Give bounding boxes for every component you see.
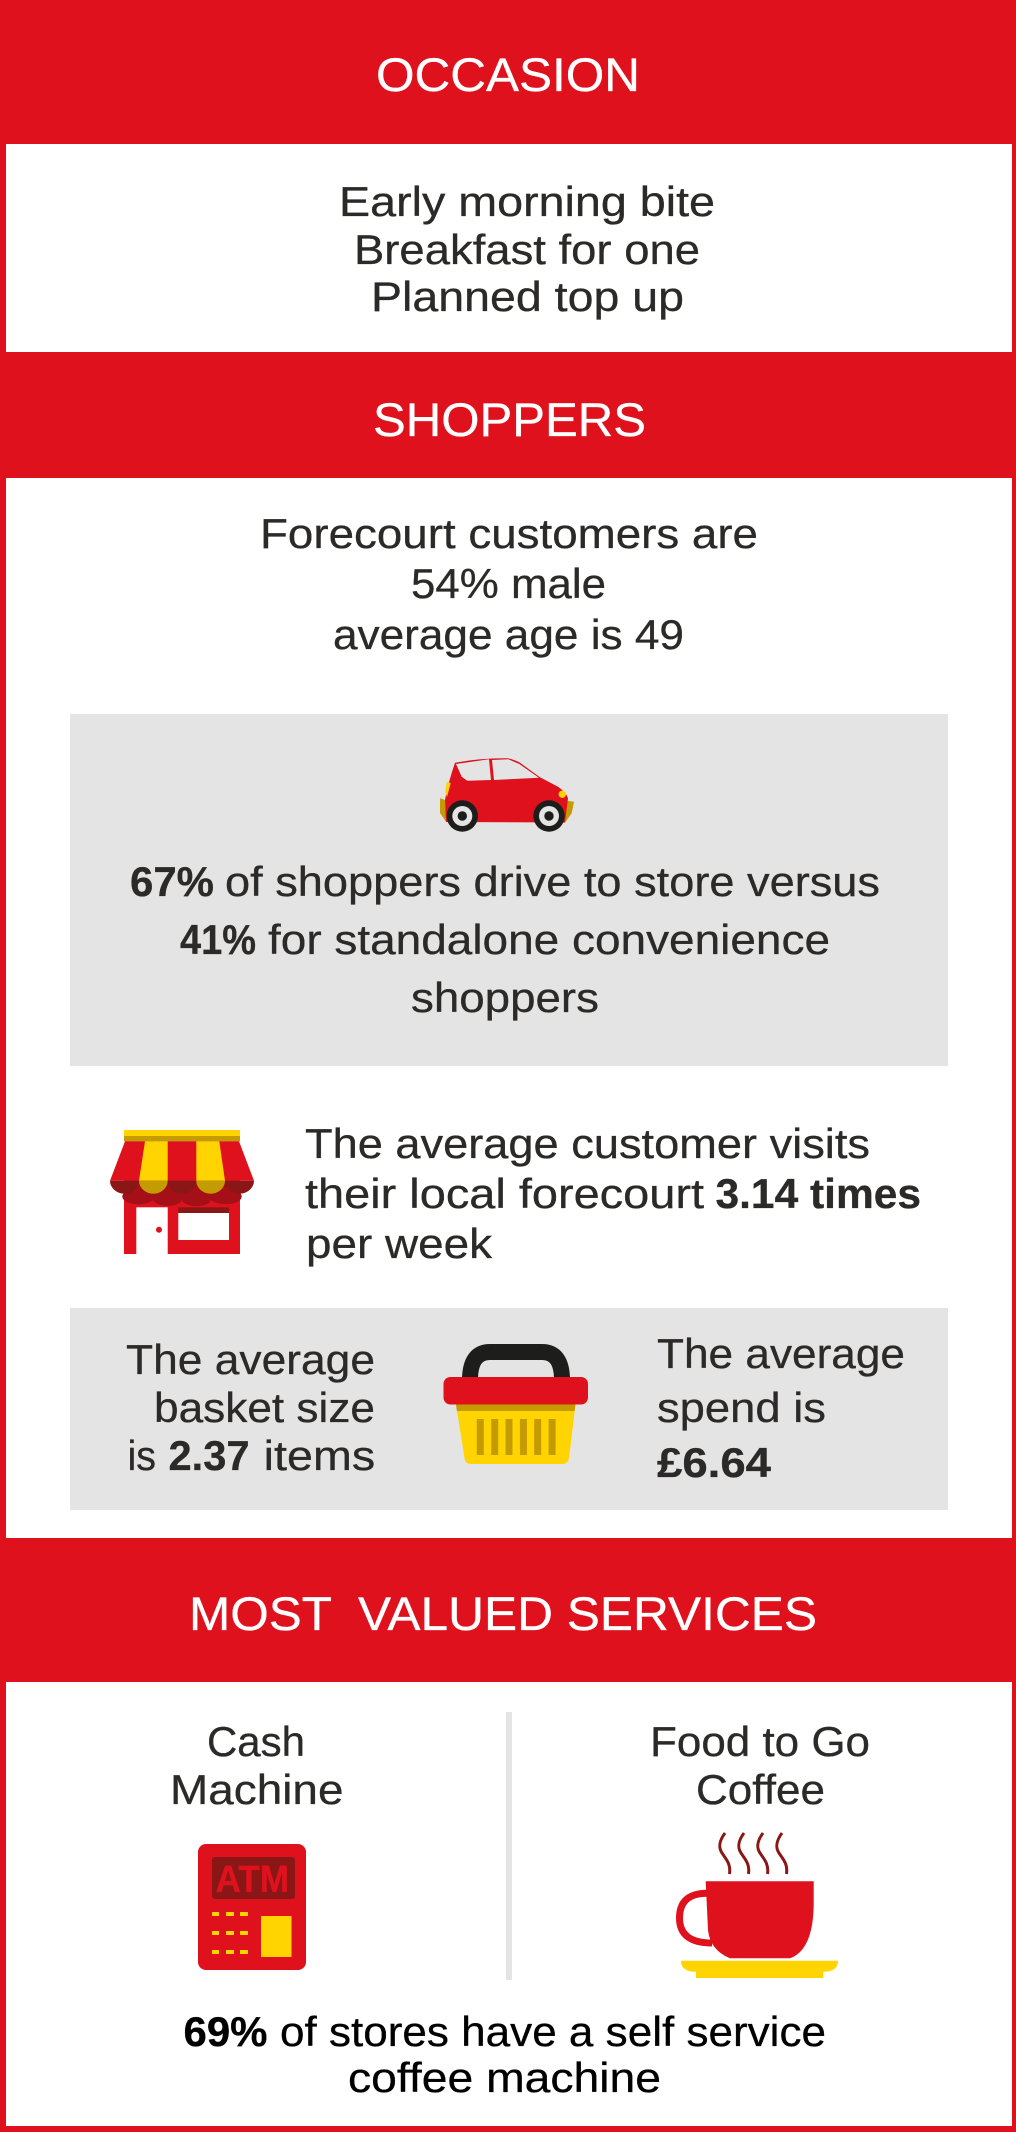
text: coffee machine statistic: of stores have a self service <box>280 2008 826 2055</box>
icon: shop front <box>110 1130 254 1254</box>
text: average spend <box>657 1330 905 1486</box>
text: basket size: items <box>264 1432 375 1479</box>
text: basket size: is <box>128 1432 156 1479</box>
heading: most valued services: VALUED SERVICES <box>358 1587 817 1640</box>
icon: coffee cup <box>680 1833 838 1978</box>
heading: shoppers: SHOPPERS <box>373 393 646 446</box>
heading: most valued services: MOST <box>189 1587 332 1640</box>
panel: most valued services <box>6 1682 1012 2126</box>
text: food to go coffee: Coffee <box>696 1766 825 1813</box>
text: basket size: 2.37 <box>168 1432 250 1479</box>
text: drive to store statistic: 41% <box>180 916 256 963</box>
text: cash machine: Cash <box>207 1718 305 1765</box>
panel: occasion list: Breakfast for one <box>354 226 700 273</box>
text: basket size <box>126 1336 375 1479</box>
text: basket size: The average <box>126 1336 375 1383</box>
text: visit frequency <box>305 1120 921 1267</box>
panel: shoppers <box>6 478 1012 1538</box>
text: food to go coffee <box>650 1718 870 1813</box>
text: average spend: The average <box>657 1330 905 1377</box>
text: basket size: basket size <box>154 1384 375 1431</box>
text: visit frequency: 3.14 times <box>716 1170 921 1217</box>
text: cash machine: Machine <box>170 1766 344 1813</box>
text: drive to store statistic: 67% <box>130 858 214 905</box>
text: drive to store statistic: shoppers <box>411 974 599 1021</box>
text: average spend: spend is <box>657 1384 826 1431</box>
text: drive to store statistic: for standalone convenience <box>268 916 830 963</box>
text: cash machine <box>170 1718 344 1813</box>
icon: car <box>440 758 574 832</box>
text: coffee machine statistic: 69% <box>184 2008 268 2055</box>
text: shopper demographics: 54% male <box>411 560 606 607</box>
text: shopper demographics: average age is 49 <box>333 611 684 658</box>
heading: occasion: OCCASION <box>376 48 640 101</box>
heading: shoppers <box>0 352 1016 478</box>
text: coffee machine statistic <box>184 2008 826 2101</box>
text: shopper demographics <box>260 510 758 658</box>
text: shopper demographics: Forecourt customers are <box>260 510 758 557</box>
text: visit frequency: The average customer visits <box>305 1120 870 1167</box>
text: coffee machine statistic: coffee machine <box>348 2054 661 2101</box>
icon: ATM: ATM <box>216 1859 289 1901</box>
panel: occasion list: Early morning bite <box>339 178 715 225</box>
icon: shopping basket <box>444 1352 588 1464</box>
text: drive to store statistic <box>130 858 880 1021</box>
text: food to go coffee: Food to Go <box>650 1718 870 1765</box>
panel: drive to store <box>70 714 948 1066</box>
heading: occasion <box>0 0 1016 144</box>
text: drive to store statistic: of shoppers drive to store versus <box>225 858 880 905</box>
text: visit frequency: their local forecourt <box>305 1170 704 1217</box>
text: average spend: £6.64 <box>657 1439 772 1486</box>
heading: most valued services <box>0 1538 1016 1682</box>
icon: ATM <box>198 1844 306 1970</box>
panel: basket and spend <box>70 1308 948 1510</box>
text: visit frequency: per week <box>306 1220 493 1267</box>
panel: occasion list: Planned top up <box>371 273 684 320</box>
panel: occasion list <box>6 144 1012 352</box>
